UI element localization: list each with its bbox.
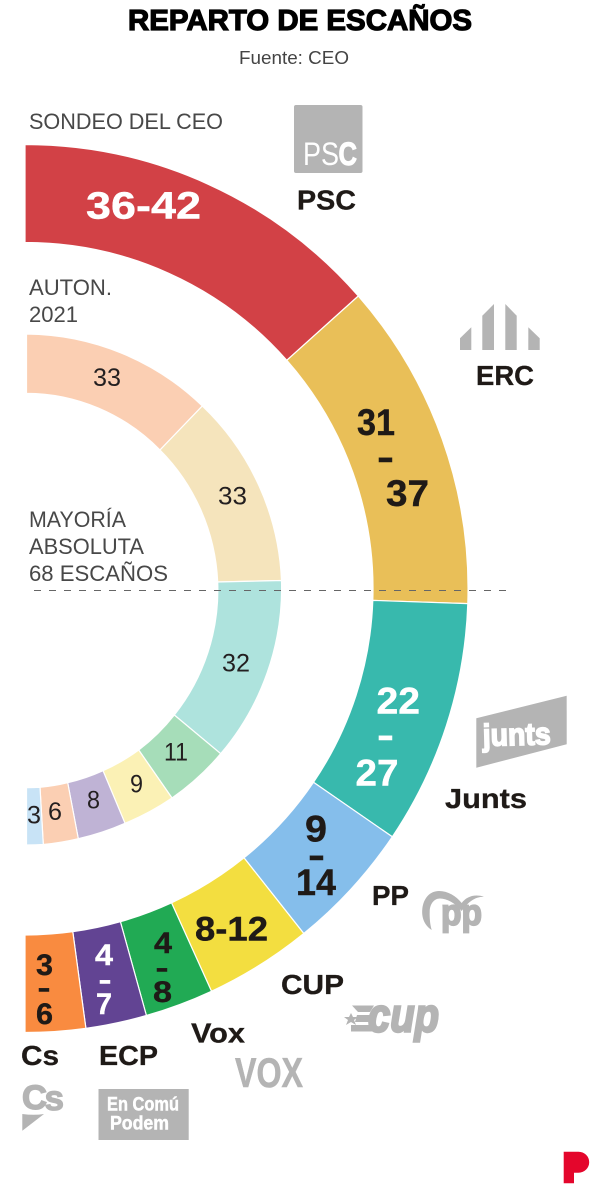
segment: Cs 6 bbox=[40, 783, 78, 844]
segment: Vox 3 bbox=[26, 787, 43, 845]
segment: PP 9-14: 9 bbox=[305, 809, 327, 850]
segment: ERC 31-37: - bbox=[377, 436, 394, 477]
logo: En Comú Podem bbox=[98, 1089, 189, 1140]
logo: Cs: C bbox=[22, 1079, 47, 1117]
logo: Junts: junts bbox=[481, 716, 551, 753]
segment: ECP 4-7: 7 bbox=[96, 988, 112, 1021]
segment: ECP 4-7: - bbox=[98, 964, 112, 995]
logo: En Comú Podem: En Comú bbox=[107, 1095, 179, 1116]
segment: CUP 9 bbox=[103, 750, 172, 823]
chart: outer ring, sondeo del CEO bbox=[25, 144, 468, 1032]
segment: Junts 22-27: 22 bbox=[376, 680, 420, 721]
segment: Cs 3-6: 6 bbox=[36, 998, 53, 1031]
segment: Junts 22-27: 27 bbox=[356, 753, 398, 794]
logo: PSC: PS bbox=[303, 136, 339, 172]
label: PP: PP bbox=[372, 880, 409, 911]
segment: PSC 36-42: 36-42 bbox=[86, 186, 201, 228]
segment: PP 9-14: - bbox=[308, 834, 325, 875]
logo: Junts bbox=[476, 696, 567, 768]
segment: CUP 8-12 bbox=[172, 858, 304, 991]
heading: mayoría absoluta: MAYORÍA bbox=[29, 507, 126, 532]
segment: PSC 33: 33 bbox=[93, 364, 121, 392]
segment: Junts 22-27 bbox=[314, 600, 468, 837]
segment: PP 9-14: 14 bbox=[296, 862, 336, 903]
segment: ERC 31-37 bbox=[287, 296, 468, 604]
logo: PSC: C bbox=[338, 136, 357, 172]
heading: autonómicas 2021: 2021 bbox=[29, 302, 78, 327]
segment: ERC 33: 33 bbox=[218, 482, 247, 510]
segment: ECP 8: 8 bbox=[87, 787, 100, 815]
logo: PP bbox=[422, 891, 484, 933]
segment: Vox 4-8: 8 bbox=[153, 976, 172, 1009]
logo: Cs: s bbox=[44, 1079, 64, 1118]
logo: PSC bbox=[294, 105, 362, 173]
segment: PP 11 bbox=[139, 715, 221, 798]
segment: PP 9-14 bbox=[244, 782, 392, 934]
heading: autonómicas 2021: AUTON. bbox=[29, 275, 112, 300]
segment: ECP 4-7 bbox=[73, 922, 146, 1028]
segment: Cs 3-6: 3 bbox=[36, 949, 53, 982]
logo: En Comú Podem: Podem bbox=[110, 1113, 169, 1134]
logo: CUP: cup bbox=[368, 988, 439, 1042]
label: ERC: ERC bbox=[476, 360, 534, 391]
segment: ERC 31-37: 31 bbox=[357, 402, 395, 443]
heading: mayoría absoluta: 68 ESCAÑOS bbox=[29, 561, 168, 586]
segment: Vox 3: 3 bbox=[27, 801, 41, 829]
segment: PSC 36-42 bbox=[25, 144, 358, 360]
heading: mayoría absoluta: ABSOLUTA bbox=[29, 534, 144, 559]
segment: PSC 33 bbox=[26, 334, 202, 450]
segment: ERC 31-37: 37 bbox=[386, 473, 429, 514]
segment: ERC 33 bbox=[160, 406, 282, 582]
segment: Cs 3-6 bbox=[25, 932, 86, 1032]
label: PSC: PSC bbox=[297, 184, 356, 215]
logo: Cs bbox=[22, 1079, 64, 1131]
segment: ECP 8 bbox=[68, 771, 125, 839]
heading: mayoría absoluta bbox=[29, 507, 168, 586]
label: Cs: Cs bbox=[21, 1040, 59, 1071]
segment: Vox 4-8: 4 bbox=[154, 927, 172, 960]
label: Junts: Junts bbox=[445, 783, 527, 814]
logo: PP: pp bbox=[441, 892, 482, 933]
logo: publisher P bbox=[564, 1152, 589, 1183]
logo: ERC bbox=[460, 304, 540, 350]
majority dashed line bbox=[34, 590, 507, 592]
source line: Fuente: CEO bbox=[239, 48, 349, 68]
segment: CUP 9: 9 bbox=[130, 771, 143, 799]
segment: ECP 4-7: 4 bbox=[95, 939, 113, 972]
label: CUP: CUP bbox=[281, 969, 344, 1000]
heading: autonómicas 2021 bbox=[29, 275, 112, 327]
logo: Vox: VOX bbox=[235, 1049, 303, 1096]
segment: Junts 32 bbox=[174, 580, 282, 754]
segment: Cs 3-6: - bbox=[38, 972, 50, 1003]
segment: Vox 4-8 bbox=[120, 903, 212, 1016]
label: Vox: Vox bbox=[191, 1017, 245, 1048]
segment: Junts 32: 32 bbox=[222, 650, 250, 678]
logo: CUP bbox=[344, 988, 439, 1042]
label: ECP: ECP bbox=[99, 1040, 158, 1071]
chart: inner ring, autonómicas 2021 bbox=[26, 334, 282, 845]
title: REPARTO DE ESCAÑOS bbox=[128, 3, 472, 37]
segment: CUP 8-12: 8-12 bbox=[195, 911, 268, 949]
segment: Vox 4-8: - bbox=[156, 952, 168, 983]
segment: Junts 22-27: - bbox=[377, 714, 394, 755]
segment: Cs 6: 6 bbox=[48, 798, 62, 826]
segment: PP 11: 11 bbox=[164, 739, 188, 767]
heading: sondeo del CEO: SONDEO DEL CEO bbox=[29, 109, 223, 134]
